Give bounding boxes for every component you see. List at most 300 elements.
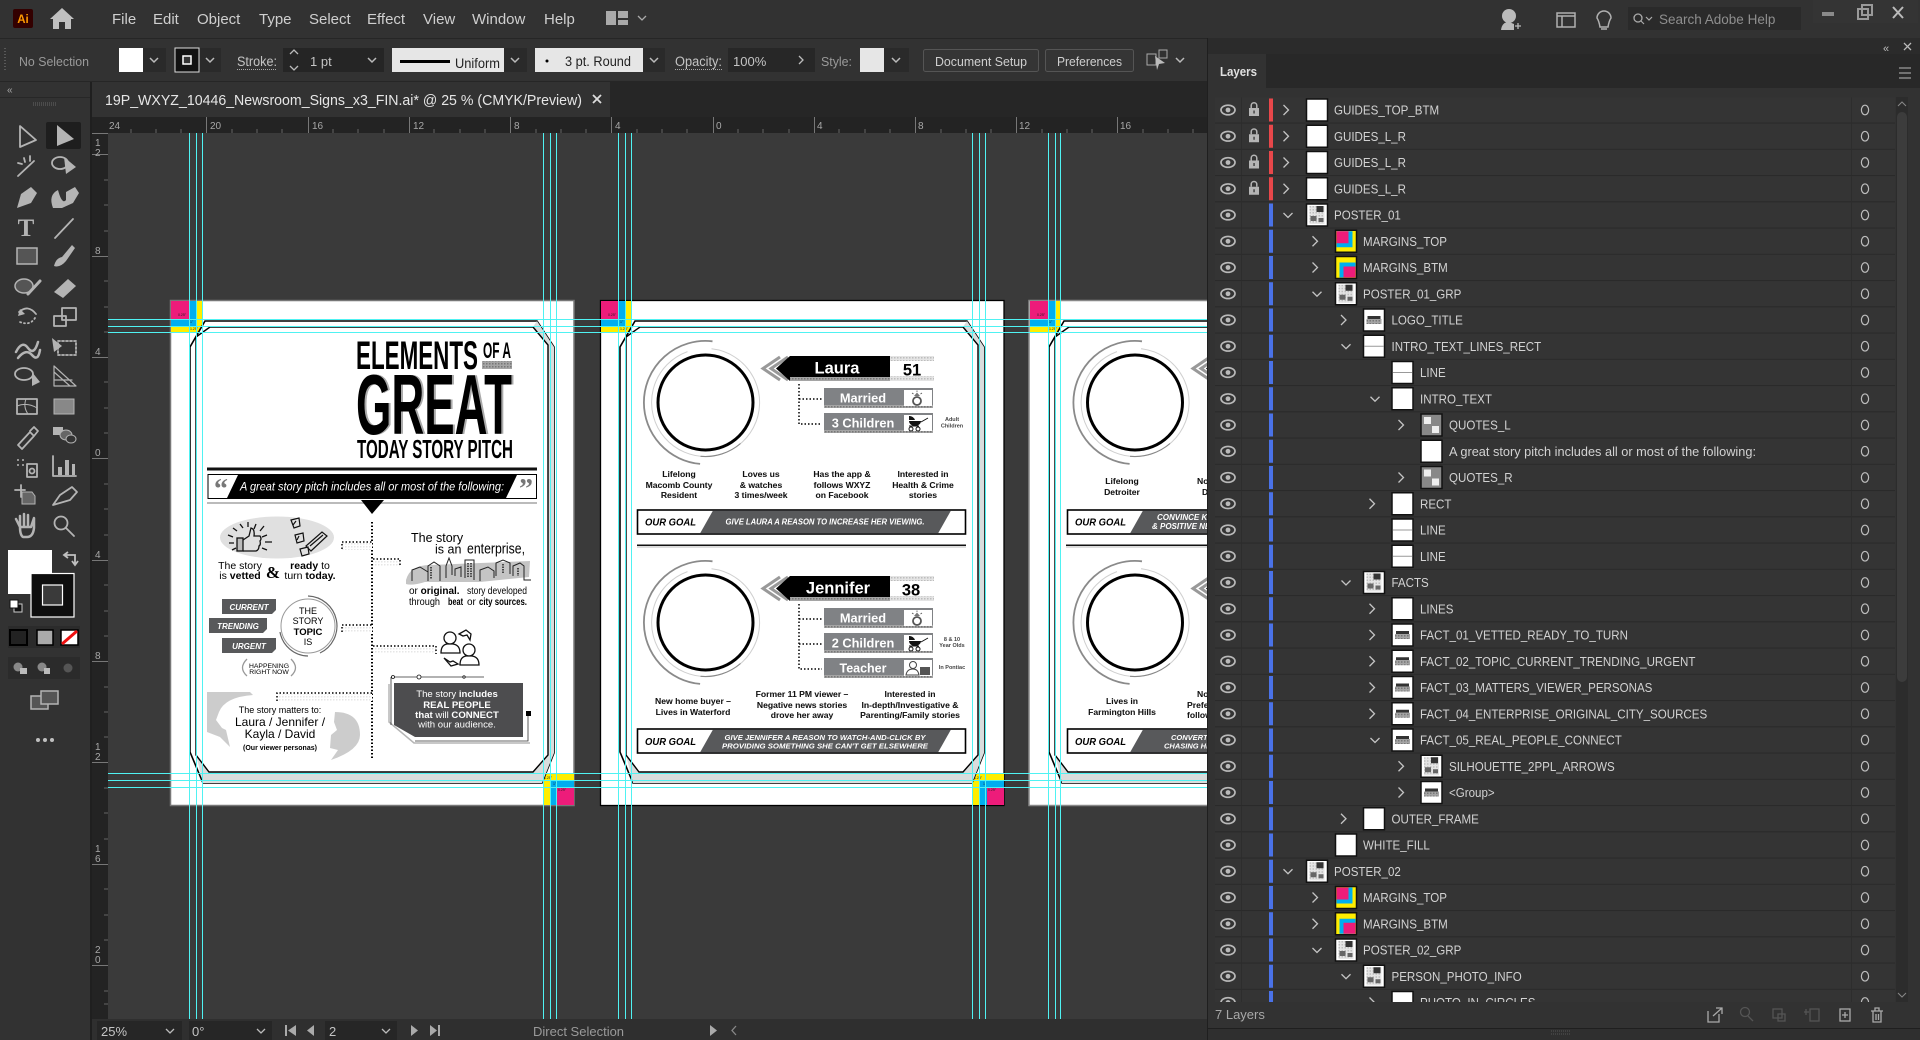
menu items: Edit [153, 11, 180, 28]
tag: Married [824, 608, 933, 628]
Jennifer facts: Negative news stories [757, 700, 847, 710]
vertical ruler: 1 [95, 844, 101, 855]
horizontal ruler: 20 [210, 121, 222, 132]
status arrows [710, 1025, 736, 1036]
layer: POSTER_01_GRP: POSTER_01_GRP [1363, 287, 1461, 301]
layer: Group [1215, 780, 1895, 806]
brush definition: 3 pt. Round [565, 54, 631, 69]
menu items: Effect [367, 11, 406, 28]
layer: FACT_01: FACT_01_VETTED_READY_TO_TURN [1420, 628, 1628, 643]
icon: skyline [406, 558, 531, 585]
top margin marks: 1" [190, 320, 194, 324]
persona photo circle: Jennifer [644, 561, 760, 684]
menu items: Object [197, 11, 241, 28]
icon: shaper and eraser [15, 279, 76, 298]
stroke profile: Uniform [455, 56, 500, 71]
top margin marks [601, 301, 632, 332]
name banner: Jennifer: 38 [902, 582, 920, 600]
callout: real people box: REAL PEOPLE [423, 700, 491, 711]
artboard 2: persona poster, Laura and Jennifer [600, 300, 1004, 806]
Laura facts: 3 times/week [734, 490, 788, 500]
bottom margin marks [543, 774, 574, 805]
layer: FACT_03 [1215, 675, 1895, 701]
facts: bottom persona: follow [1187, 710, 1212, 720]
layer: POSTER_02_GRP: POSTER_02_GRP [1363, 943, 1461, 958]
cyan guides [108, 133, 1207, 1019]
bottom margin marks: 1" [553, 782, 557, 786]
menu items: Window [472, 11, 526, 28]
layer: GUIDES_L_R: GUIDES_L_R [1334, 129, 1406, 144]
rotation field [189, 1021, 272, 1040]
top margin marks [1030, 301, 1060, 332]
tools panel: « [7, 85, 13, 96]
search box: Search Adobe Help [1659, 12, 1775, 27]
layer: POSTER_02: POSTER_02 [1334, 864, 1401, 879]
layer: PERSON_PHOTO_INFO [1215, 964, 1895, 990]
layer: GUIDES_TOP_BTM [1215, 97, 1895, 124]
panel tab [1220, 54, 1920, 88]
vertical ruler: 4 [95, 550, 101, 561]
section divider [637, 544, 966, 548]
name banner: Laura: 51 [903, 362, 921, 380]
stroke weight [237, 48, 384, 72]
goal bar: top persona: CONVINCE KAYLA [1157, 513, 1229, 522]
layer: QUOTES_L [1215, 412, 1895, 439]
facts: bottom persona: No [1197, 689, 1208, 699]
Laura facts: on Facebook [815, 490, 869, 500]
goal bar: top persona [1068, 510, 1396, 534]
layer: MARGINS_TOP [1215, 885, 1895, 911]
layer: RECT: RECT [1420, 497, 1452, 511]
layer: MARGINS_TOP: MARGINS_TOP [1363, 234, 1447, 249]
layer: MARGINS_BTM [1215, 255, 1895, 281]
layer: WHITE_FILL [1215, 832, 1895, 859]
rotation field: 0° [192, 1024, 204, 1039]
icon: eyedropper and blend [18, 427, 76, 449]
layer: INTRO_TEXT_LINES_RECT: INTRO_TEXT_LINES_RECT [1392, 339, 1542, 354]
drawing mode buttons [8, 657, 80, 679]
vertical ruler: 2 [95, 148, 101, 159]
fact 2: story topic tags: HAPPENING [249, 663, 289, 670]
name banner: Jennifer: Jennifer [806, 580, 871, 598]
icon: checklist and pen [291, 518, 327, 556]
layer: LINE: LINE [1420, 549, 1446, 564]
layer: POSTER_01: POSTER_01 [1334, 208, 1401, 223]
facts: top persona: D [1202, 487, 1208, 497]
bottom margin marks: 0.25" [558, 788, 567, 792]
callout: real people box [389, 675, 531, 743]
bottom margin marks: 1.25" [974, 776, 983, 780]
icon: type and line: T [18, 215, 35, 242]
button: preferences [1046, 50, 1134, 72]
fact 3: people icon [441, 630, 479, 666]
Laura facts: Resident [661, 490, 697, 500]
layer: FACT_05 [1215, 727, 1895, 754]
top margin marks: 0.25" [608, 313, 617, 317]
vertical ruler: 6 [95, 854, 101, 865]
fact 5: personas and silhouettes: Kayla / David [245, 727, 315, 741]
layer: FACT_04: FACT_04_ENTERPRISE_ORIGINAL_CITY_SOURCES [1420, 707, 1707, 721]
icon: pen and curvature [17, 187, 79, 208]
top margin marks: 0.25" [1037, 313, 1046, 317]
layer: POSTER_02_GRP [1215, 937, 1895, 964]
fact 4: enterprise, original, city sources: or [467, 597, 477, 608]
icon: workspace switcher [606, 11, 646, 25]
Laura facts: Loves us [742, 469, 780, 479]
layer: PHOTO_IN_CIRCLES, clipped [1215, 990, 1895, 1016]
icon: hand and zoom [16, 514, 74, 537]
icon: home [50, 8, 74, 29]
icon: thumbs up [228, 522, 272, 551]
layer: GUIDES_L_R: GUIDES_L_R [1334, 155, 1406, 170]
menu items: File [112, 11, 136, 28]
facts: bottom persona [1088, 689, 1212, 720]
notes: ages and location: Year Olds [939, 643, 965, 649]
facts: top persona: No [1197, 476, 1208, 486]
artboard 1: elements of a great story pitch poster [170, 300, 574, 806]
layers list [1215, 97, 1895, 1016]
fact 4: enterprise, original, city sources: The story [411, 531, 464, 545]
fact 1: vetted and ready: & [266, 563, 280, 582]
Jennifer facts: In-depth/Investigative & [862, 700, 958, 710]
fact 1: vetted and ready: turn today. [284, 570, 336, 582]
layer: LINE [1215, 360, 1895, 386]
tag: 2 Children: 2 Children [832, 636, 894, 650]
layer: POSTER_02 [1215, 859, 1895, 885]
horizontal ruler: 8 [918, 121, 924, 132]
horizontal ruler: 16 [312, 121, 324, 132]
connector lines [277, 542, 436, 701]
Laura facts [646, 469, 954, 500]
horizontal ruler: 4 [817, 121, 823, 132]
layer: OUTER_FRAME [1215, 806, 1895, 832]
layer: POSTER_01_GRP [1215, 281, 1895, 307]
fact 5: personas and silhouettes: Laura / Jennifer / [235, 715, 326, 729]
layer: MARGINS_BTM: MARGINS_BTM [1363, 917, 1448, 931]
vertical ruler: 0 [95, 448, 101, 459]
facts: bottom persona: Prefe [1187, 700, 1209, 710]
note: adult children [941, 417, 964, 430]
goal bar: Jennifer: OUR GOAL [645, 737, 696, 748]
intro banner: A great story pitch includes all or most of the following: [239, 480, 504, 494]
name banner: Laura [763, 356, 934, 381]
control options bar [0, 39, 1207, 82]
layer: PERSON_PHOTO_INFO: PERSON_PHOTO_INFO [1392, 969, 1522, 984]
scrollbar [1896, 97, 1908, 1002]
layer: LINE: LINE [1420, 523, 1446, 538]
layer: FACTS [1215, 570, 1895, 596]
fact 1: vetted and ready [218, 516, 336, 582]
icon: Ai logo [13, 9, 33, 28]
layer: PHOTO_IN_CIRCLES, clipped: PHOTO_IN_CIRCLES [1420, 995, 1535, 1010]
poster title: OF A [483, 338, 511, 363]
vertical ruler: 8 [95, 246, 101, 257]
callout: real people box: with our audience. [417, 720, 496, 730]
layer: FACT_01 [1215, 622, 1895, 649]
goal bar: Laura [638, 510, 966, 534]
stroke swatch [175, 48, 221, 72]
poster title: TODAY STORY PITCH [357, 434, 513, 464]
icon: magic wand and lasso [18, 156, 76, 176]
icon: shape builder and perspective [15, 366, 76, 386]
goal bar: Jennifer [638, 729, 966, 753]
goal bar: top persona: OUR GOAL [1075, 518, 1126, 528]
callout: real people box: that will CONNECT [415, 710, 499, 721]
layer: INTRO_TEXT [1215, 386, 1895, 412]
name arrow: top [1193, 356, 1364, 381]
intro banner: ” [519, 474, 533, 505]
layer: intro sentence: A great story pitch includes all or most of the following: [1449, 444, 1756, 459]
brush definition [535, 48, 665, 72]
tag: Married: Married [840, 610, 886, 626]
zoom field [97, 1021, 182, 1040]
Laura facts: & watches [740, 480, 782, 490]
Jennifer facts: Former 11 PM viewer – [756, 689, 849, 699]
panel footer [1208, 1002, 1920, 1028]
layer: MARGINS_TOP: MARGINS_TOP [1363, 890, 1447, 905]
fact 4: enterprise, original, city sources: city sources. [479, 597, 527, 608]
colour mode buttons [8, 626, 80, 648]
horizontal ruler: 8 [514, 121, 520, 132]
layer: LOGO_TITLE: LOGO_TITLE [1392, 313, 1463, 328]
goal bar: Jennifer: PROVIDING SOMETHING SHE CAN'T GET ELSEWHERE [722, 742, 929, 750]
top margin marks: 1" [620, 320, 624, 324]
menu items [112, 11, 575, 28]
layer: Group: <Group> [1449, 785, 1495, 800]
fact 2: story topic tags: TRENDING [217, 622, 259, 631]
vertical ruler: 4 [95, 347, 101, 358]
icon: rectangle and brush [17, 245, 75, 266]
horizontal ruler: 12 [413, 121, 425, 132]
icon: arrange [1147, 50, 1184, 70]
panel dock header [1208, 38, 1920, 55]
poster title: ELEMENTS [356, 334, 478, 378]
fact 1: vetted and ready: ready to [290, 560, 330, 572]
callout: real people box: The story includes [416, 689, 498, 700]
poster frame [190, 321, 554, 783]
layer: QUOTES_R [1215, 465, 1895, 491]
persona photo circle: Laura [644, 341, 760, 464]
tools panel [0, 81, 92, 1040]
fact 2: story topic tags: RIGHT NOW [249, 669, 289, 676]
Laura facts: Macomb County [646, 480, 713, 490]
top margin marks: 1.25" [190, 327, 199, 331]
fact 5: personas and silhouettes: The story matters to: [239, 705, 321, 715]
tag: Married [824, 388, 933, 408]
opacity: Opacity: [675, 54, 722, 69]
style swatch [821, 48, 909, 72]
layer: LINE [1215, 544, 1895, 570]
Jennifer facts: New home buyer – [655, 696, 731, 706]
canvas background [108, 133, 1207, 1019]
facts: top persona: Lifelong [1105, 476, 1139, 486]
Laura facts: Health & Crime [892, 480, 954, 490]
bottom margin marks: 1" [983, 782, 987, 786]
horizontal ruler: 12 [1019, 121, 1031, 132]
intro banner: “ [214, 474, 228, 505]
fact 4: enterprise, original, city sources: beat [448, 597, 463, 608]
layer: OUTER_FRAME: OUTER_FRAME [1392, 812, 1479, 826]
stroke profile [392, 48, 527, 72]
Laura facts: Lifelong [662, 469, 696, 479]
tag: Teacher: Teacher [839, 662, 887, 676]
vertical ruler: 1 [95, 138, 101, 149]
section divider [1066, 544, 1226, 548]
button: document setup: Document Setup [935, 54, 1027, 69]
goal bar: top persona: & POSITIVE NEWS [1152, 522, 1224, 531]
layer: LINES: LINES [1420, 602, 1453, 616]
facts: bottom persona: Lives in [1106, 696, 1138, 706]
poster title: GREAT [356, 358, 512, 453]
fact 2: story topic tags [209, 596, 337, 676]
fact 4: enterprise, original, city sources: is an [435, 542, 461, 556]
poster frame [1049, 321, 1413, 783]
fact 4: enterprise, original, city sources: through [409, 597, 440, 608]
menu items: Type [259, 11, 292, 28]
name arrow: bottom [1193, 576, 1364, 601]
fact 5: personas and silhouettes [207, 692, 360, 760]
icon: change screen mode [31, 691, 58, 709]
window controls [1813, 0, 1918, 23]
layer: intro sentence [1215, 439, 1895, 465]
vertical ruler: 1 [95, 742, 101, 753]
icon: warp and free transform [16, 338, 76, 358]
layer: FACT_05: FACT_05_REAL_PEOPLE_CONNECT [1420, 733, 1622, 748]
Jennifer facts: drove her away [771, 710, 834, 720]
search box [1628, 7, 1801, 30]
name banner: Jennifer [763, 576, 934, 601]
Jennifer facts: Lives in Waterford [656, 707, 730, 717]
layer: INTRO_TEXT: INTRO_TEXT [1420, 392, 1492, 406]
status text: Direct Selection [533, 1024, 624, 1039]
layer: LOGO_TITLE [1215, 307, 1895, 334]
menu items: Help [544, 11, 575, 28]
layer: GUIDES_L_R [1215, 124, 1895, 150]
opacity [675, 48, 815, 72]
notes: ages and location: 8 & 10 [944, 637, 960, 643]
layer: FACT_02 [1215, 649, 1895, 675]
layer: QUOTES_R: QUOTES_R [1449, 470, 1513, 485]
stroke weight: 1 pt [310, 54, 332, 69]
tag: 3 Children: 3 Children [832, 416, 894, 430]
top margin marks: 1" [1049, 320, 1053, 324]
fact 4: enterprise, original, city sources: or original. [409, 586, 460, 597]
icon: panel toggle [1557, 13, 1575, 27]
icon: rotate and scale [18, 308, 76, 326]
edit toolbar dots [36, 738, 54, 742]
layer: LINES [1215, 596, 1895, 622]
dotted branch: Laura [799, 384, 822, 424]
tag: 3 Children [824, 413, 933, 433]
icon: account [1501, 9, 1521, 30]
Laura facts: follows WXYZ [814, 480, 870, 490]
top margin marks: 0.25" [178, 313, 187, 317]
fact 2: story topic tags: THE [299, 606, 317, 616]
menu items: Select [309, 11, 352, 28]
artboard 3: persona poster, partly hidden by panel [1029, 300, 1413, 806]
Laura facts: Interested in [897, 469, 949, 479]
layer: INTRO_TEXT_LINES_RECT [1215, 334, 1895, 360]
layer: GUIDES_L_R: GUIDES_L_R [1334, 182, 1406, 196]
layer: LINE: LINE [1420, 365, 1446, 380]
stroke weight: Stroke: [237, 54, 277, 69]
fact 4: enterprise, original, city sources: story developed [467, 586, 527, 597]
layer: GUIDES_TOP_BTM: GUIDES_TOP_BTM [1334, 103, 1439, 118]
fact 2: story topic tags: CURRENT [229, 603, 270, 612]
layer: FACT_02: FACT_02_TOPIC_CURRENT_TRENDING_URGENT [1420, 654, 1696, 669]
layer: POSTER_01 [1215, 202, 1895, 229]
opacity: 100% [733, 54, 767, 69]
Jennifer facts: Interested in [884, 689, 936, 699]
intro banner [207, 468, 537, 514]
facts: top persona: Detroiter [1104, 487, 1141, 497]
fill and stroke swatches [8, 550, 78, 617]
icon: mesh and gradient [17, 399, 74, 414]
tag: Teacher [824, 658, 933, 678]
top margin marks: 1.25" [1049, 327, 1058, 331]
panel bottom edge [1208, 1028, 1920, 1040]
style swatch: Style: [821, 54, 852, 69]
vertical ruler: 8 [95, 651, 101, 662]
vertical ruler: 2 [95, 752, 101, 763]
fact 5: personas and silhouettes: (Our viewer personas) [243, 745, 317, 752]
poster frame [620, 321, 984, 783]
layer: FACT_04 [1215, 701, 1895, 727]
notes: ages and location: In Pontiac [939, 665, 965, 671]
document tab bar: 19P_WXYZ_10446_Newsroom_Signs_x3_FIN.ai* @ 25 % (CMYK/Preview) [105, 93, 582, 109]
icon: lightbulb [1597, 11, 1611, 29]
fact 4: enterprise, original, city sources [406, 531, 531, 608]
layer: FACT_03: FACT_03_MATTERS_VIEWER_PERSONAS [1420, 680, 1652, 695]
application menu bar [0, 0, 1920, 39]
artboard navigation [285, 1021, 440, 1040]
bottom margin marks: 0.25" [988, 788, 997, 792]
button: document setup [924, 50, 1038, 72]
bottom margin marks [973, 774, 1004, 805]
icon: symbol sprayer and graph [17, 456, 76, 477]
goal bar: bottom persona: CHASING HER [1164, 742, 1217, 750]
icon: artboard and slice [15, 485, 77, 505]
fill swatch [119, 48, 166, 72]
Jennifer facts [655, 689, 960, 720]
goal bar: bottom persona: OUR GOAL [1075, 737, 1126, 748]
layer: SILHOUETTE_2PPL_ARROWS [1215, 754, 1895, 780]
horizontal ruler: 4 [615, 121, 621, 132]
layer: MARGINS_TOP [1215, 229, 1895, 255]
zoom field: 25% [101, 1024, 127, 1039]
button: preferences: Preferences [1057, 54, 1122, 69]
layer: MARGINS_BTM: MARGINS_BTM [1363, 260, 1448, 275]
fact 2: story topic tags: STORY [293, 616, 323, 626]
central dotted spine [371, 522, 373, 758]
name banner: Laura: Laura [815, 360, 860, 378]
tag: Married: Married [840, 390, 886, 406]
icon: type and line [18, 215, 73, 242]
layer: WHITE_FILL: WHITE_FILL [1363, 838, 1430, 853]
top margin marks [171, 301, 202, 332]
layer: LINE [1215, 517, 1895, 544]
layer: RECT [1215, 491, 1895, 517]
dotted branch: Jennifer [799, 604, 822, 669]
poster title [356, 334, 514, 464]
poster title: GREAT [358, 358, 514, 453]
Laura facts: Has the app & [813, 469, 871, 479]
horizontal ruler: 24 [109, 121, 121, 132]
horizontal ruler: 0 [716, 121, 722, 132]
panel tab: Layers [1220, 64, 1257, 79]
fact 4: enterprise, original, city sources: enterprise, [467, 540, 525, 558]
layer: QUOTES_L: QUOTES_L [1449, 418, 1511, 433]
